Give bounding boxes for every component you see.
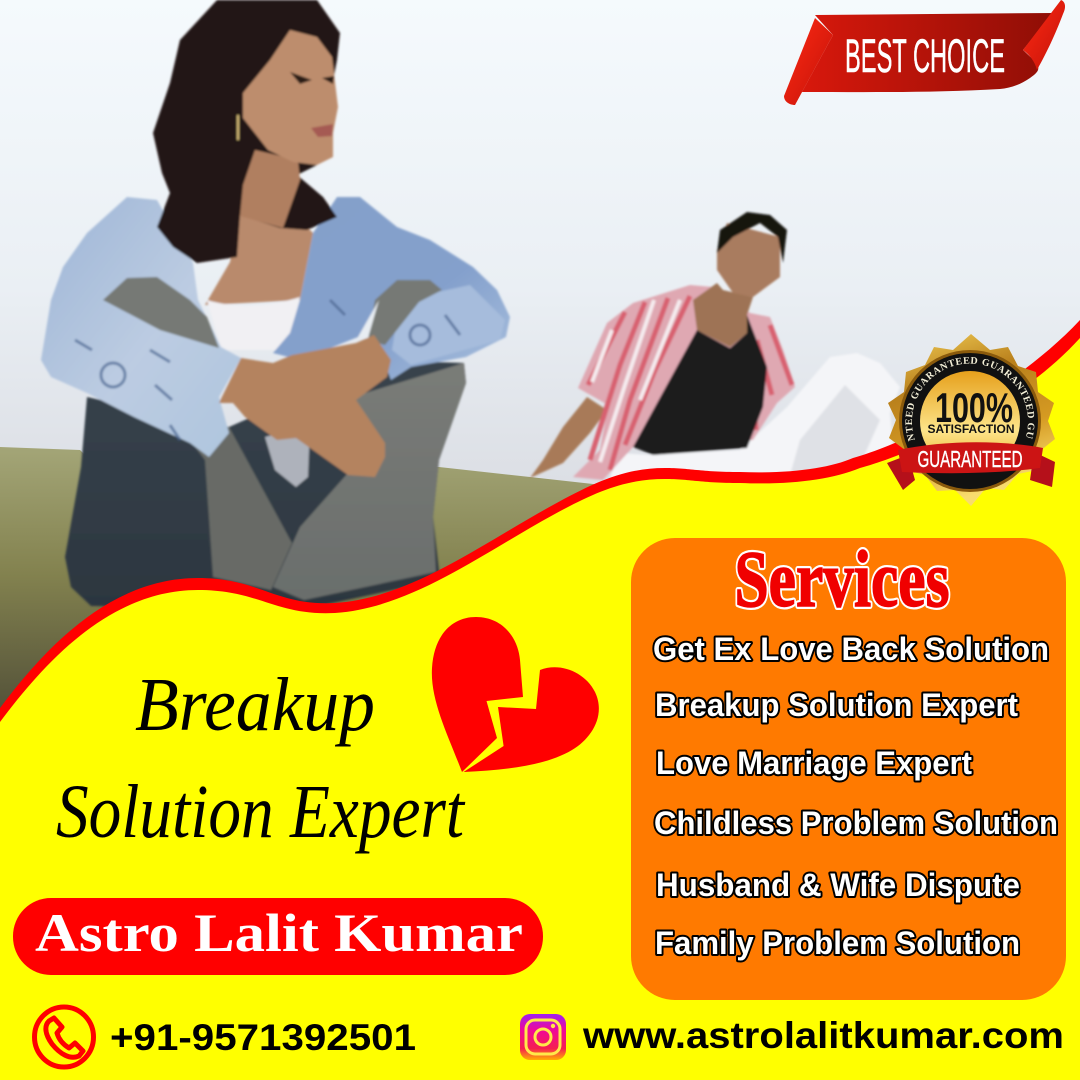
service list: Childless Problem Solution [654,805,1058,841]
neck [240,150,300,228]
services heading: Services [734,536,950,624]
badge banner [887,455,915,490]
service list [653,631,1058,961]
service list: Get Ex Love Back Solution [653,631,1049,667]
phone number: +91-9571392501 [110,1017,416,1058]
yellow lower panel [0,338,1080,1080]
service list: Breakup Solution Expert [655,687,1018,723]
ribbon: best choice [784,0,1065,105]
hands [219,335,391,477]
icon: broken heart [432,617,599,772]
chest skin [205,200,313,305]
lips and eyes [311,124,333,137]
service list: Husband & Wife Dispute [656,867,1020,903]
man sitting in the background [530,212,900,490]
icon: phone [34,1007,94,1067]
hair [153,0,340,263]
badge: 100% satisfaction guaranteed: GUARANTEED [918,446,1022,472]
badge satisfaction: SATISFACTION [928,424,1014,436]
heading: breakup solution expert: Solution Expert [56,770,466,854]
jeans [65,360,466,610]
panel: services [631,536,1066,1000]
sky background [0,0,1080,520]
white top [207,297,300,350]
heading: breakup solution expert: Breakup [135,663,375,747]
icon: instagram [520,1014,566,1060]
face [243,30,338,165]
blouse [41,197,241,457]
red wave band [0,320,1080,1080]
photo: couple sitting apart on grass [0,0,1080,740]
woman sitting in the foreground [41,0,510,610]
service list: Family Problem Solution [655,925,1020,961]
badge: 100% satisfaction guaranteed: NTEED GUARANTEED GUARANTEED GUARAN [905,357,1034,442]
website: www.astrolalitkumar.com [582,1015,1064,1056]
grass field [0,447,620,740]
service list: Love Marriage Expert [656,745,972,781]
services heading: Services [734,536,950,624]
badge: 100% satisfaction guaranteed [887,334,1055,506]
sky wedge [358,300,379,338]
badge ring text [912,364,1028,440]
knees [103,277,219,348]
badge 100%: 100% [935,384,1013,431]
heading: breakup solution expert [56,663,466,854]
name pill [13,898,543,975]
name pill: Astro Lalit Kumar [35,903,523,963]
earring [237,115,239,140]
